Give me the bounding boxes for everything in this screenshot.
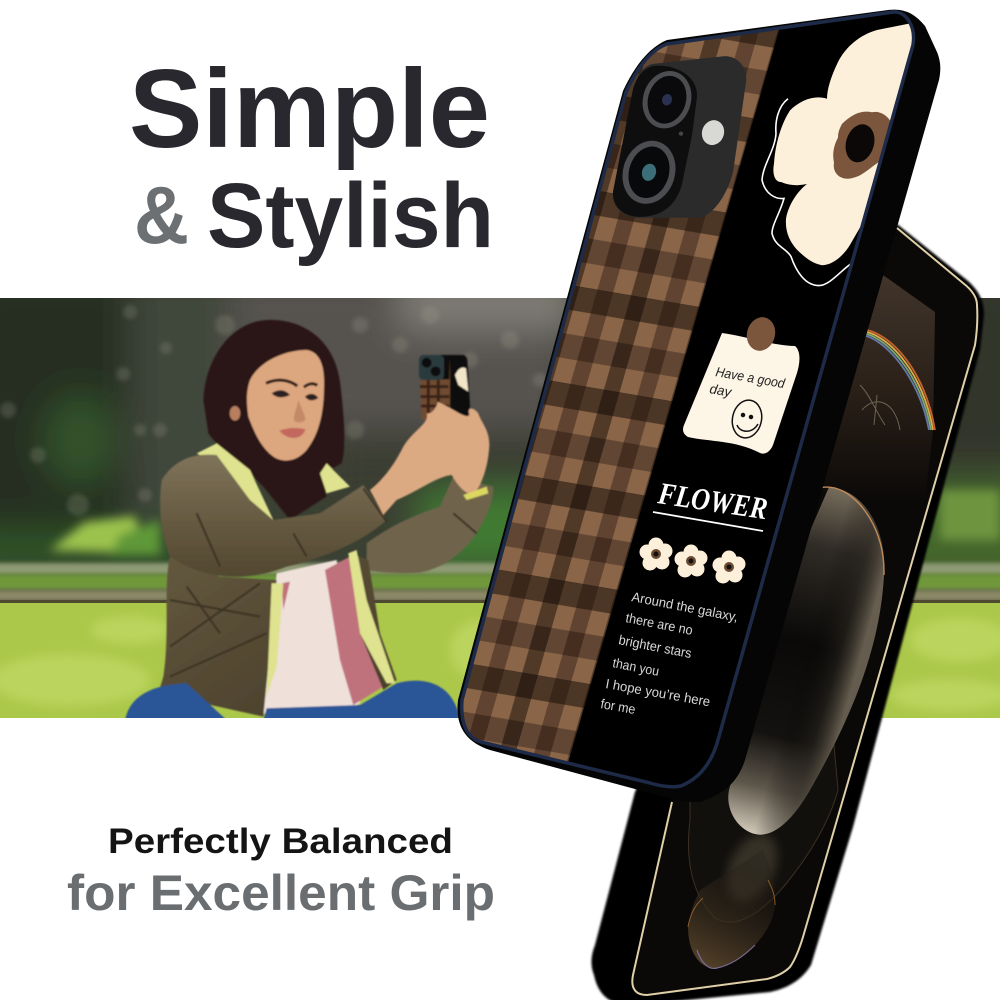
poem text: I hope you’re here (604, 676, 711, 709)
note pin (743, 314, 779, 354)
smiley (729, 397, 765, 441)
woman: near arm and shoulder (160, 455, 387, 577)
large cream flower (773, 24, 912, 266)
heading underline (653, 512, 763, 531)
three small flowers (640, 538, 746, 584)
plaid panel (440, 20, 782, 770)
woman: hair (203, 320, 344, 520)
FLOWER heading: FLOWER (655, 475, 770, 526)
wallpaper: bottom ellipse (688, 877, 775, 968)
woman: ear (230, 406, 240, 421)
note card (683, 314, 799, 454)
wallpaper: large lit form (728, 487, 884, 835)
back phone: screen wallpaper (634, 230, 976, 994)
title: & Stylish: Stylish (207, 165, 494, 267)
mini phone in hand (419, 355, 471, 420)
woman: watch band (463, 487, 488, 500)
photo background: park scene (0, 270, 1000, 723)
wallpaper: bottom glow (724, 834, 780, 902)
woman: lips (279, 428, 305, 438)
title: Simple: Simple (129, 47, 490, 171)
front phone: case back panel (463, 24, 912, 762)
front phone: navy rim (462, 12, 914, 787)
note card: day (708, 381, 734, 400)
flower brown centre (833, 112, 892, 179)
back phone: gold rim (632, 228, 977, 995)
woman: jacket body (158, 553, 397, 717)
photo: woman taking a selfie (125, 320, 493, 720)
woman: jeans (125, 681, 460, 720)
wallpaper: right rim glow (756, 497, 884, 834)
flash (699, 118, 727, 148)
poem text: than you (611, 655, 660, 679)
poem text: brighter stars (617, 632, 693, 661)
woman: shirt (263, 560, 360, 713)
back phone: black case (591, 224, 984, 1000)
title: & Stylish: & (134, 170, 189, 261)
woman: face (247, 350, 324, 461)
poem text (599, 589, 739, 717)
wallpaper: outer ellipse (688, 744, 838, 922)
note text: Have a good (714, 364, 786, 391)
woman: plaid shirt (282, 557, 383, 705)
dark lens housing (613, 66, 697, 217)
poem text: Around the galaxy, (630, 589, 739, 625)
woman: hands (370, 402, 489, 515)
white flower outline (762, 99, 853, 286)
woman: nose shadow (294, 400, 305, 422)
back phone: gold iPhone with wallpaper (591, 220, 1000, 1000)
wallpaper: rainbow arc (862, 329, 935, 430)
upper lens (636, 66, 698, 134)
woman: eyebrows (266, 380, 317, 387)
caption: Perfectly Balanced: Perfectly Balanced (108, 822, 453, 861)
bright foliage patches (50, 490, 1000, 555)
microphone dot (679, 131, 683, 136)
woman: quilted seams (170, 488, 477, 677)
poem text: for me (599, 696, 637, 717)
bokeh highlights (0, 305, 547, 516)
camera module (613, 56, 746, 218)
large flower artwork (761, 24, 912, 286)
caption: for Excellent Grip: for Excellent Grip (67, 865, 495, 921)
lower lens (615, 135, 683, 210)
wallpaper: star lines (860, 385, 900, 430)
front phone: black case shell (457, 10, 940, 802)
woman: lining yellow (197, 443, 395, 697)
woman: far arm sleeve (367, 477, 493, 573)
lawn and path (0, 563, 1000, 575)
wallpaper: top wedge (828, 275, 935, 472)
poem text: there are no (624, 610, 694, 638)
flower dark core (846, 124, 874, 162)
woman: eyes (272, 390, 318, 400)
wallpaper: orange rim light (822, 486, 885, 575)
camera bump (613, 56, 746, 218)
